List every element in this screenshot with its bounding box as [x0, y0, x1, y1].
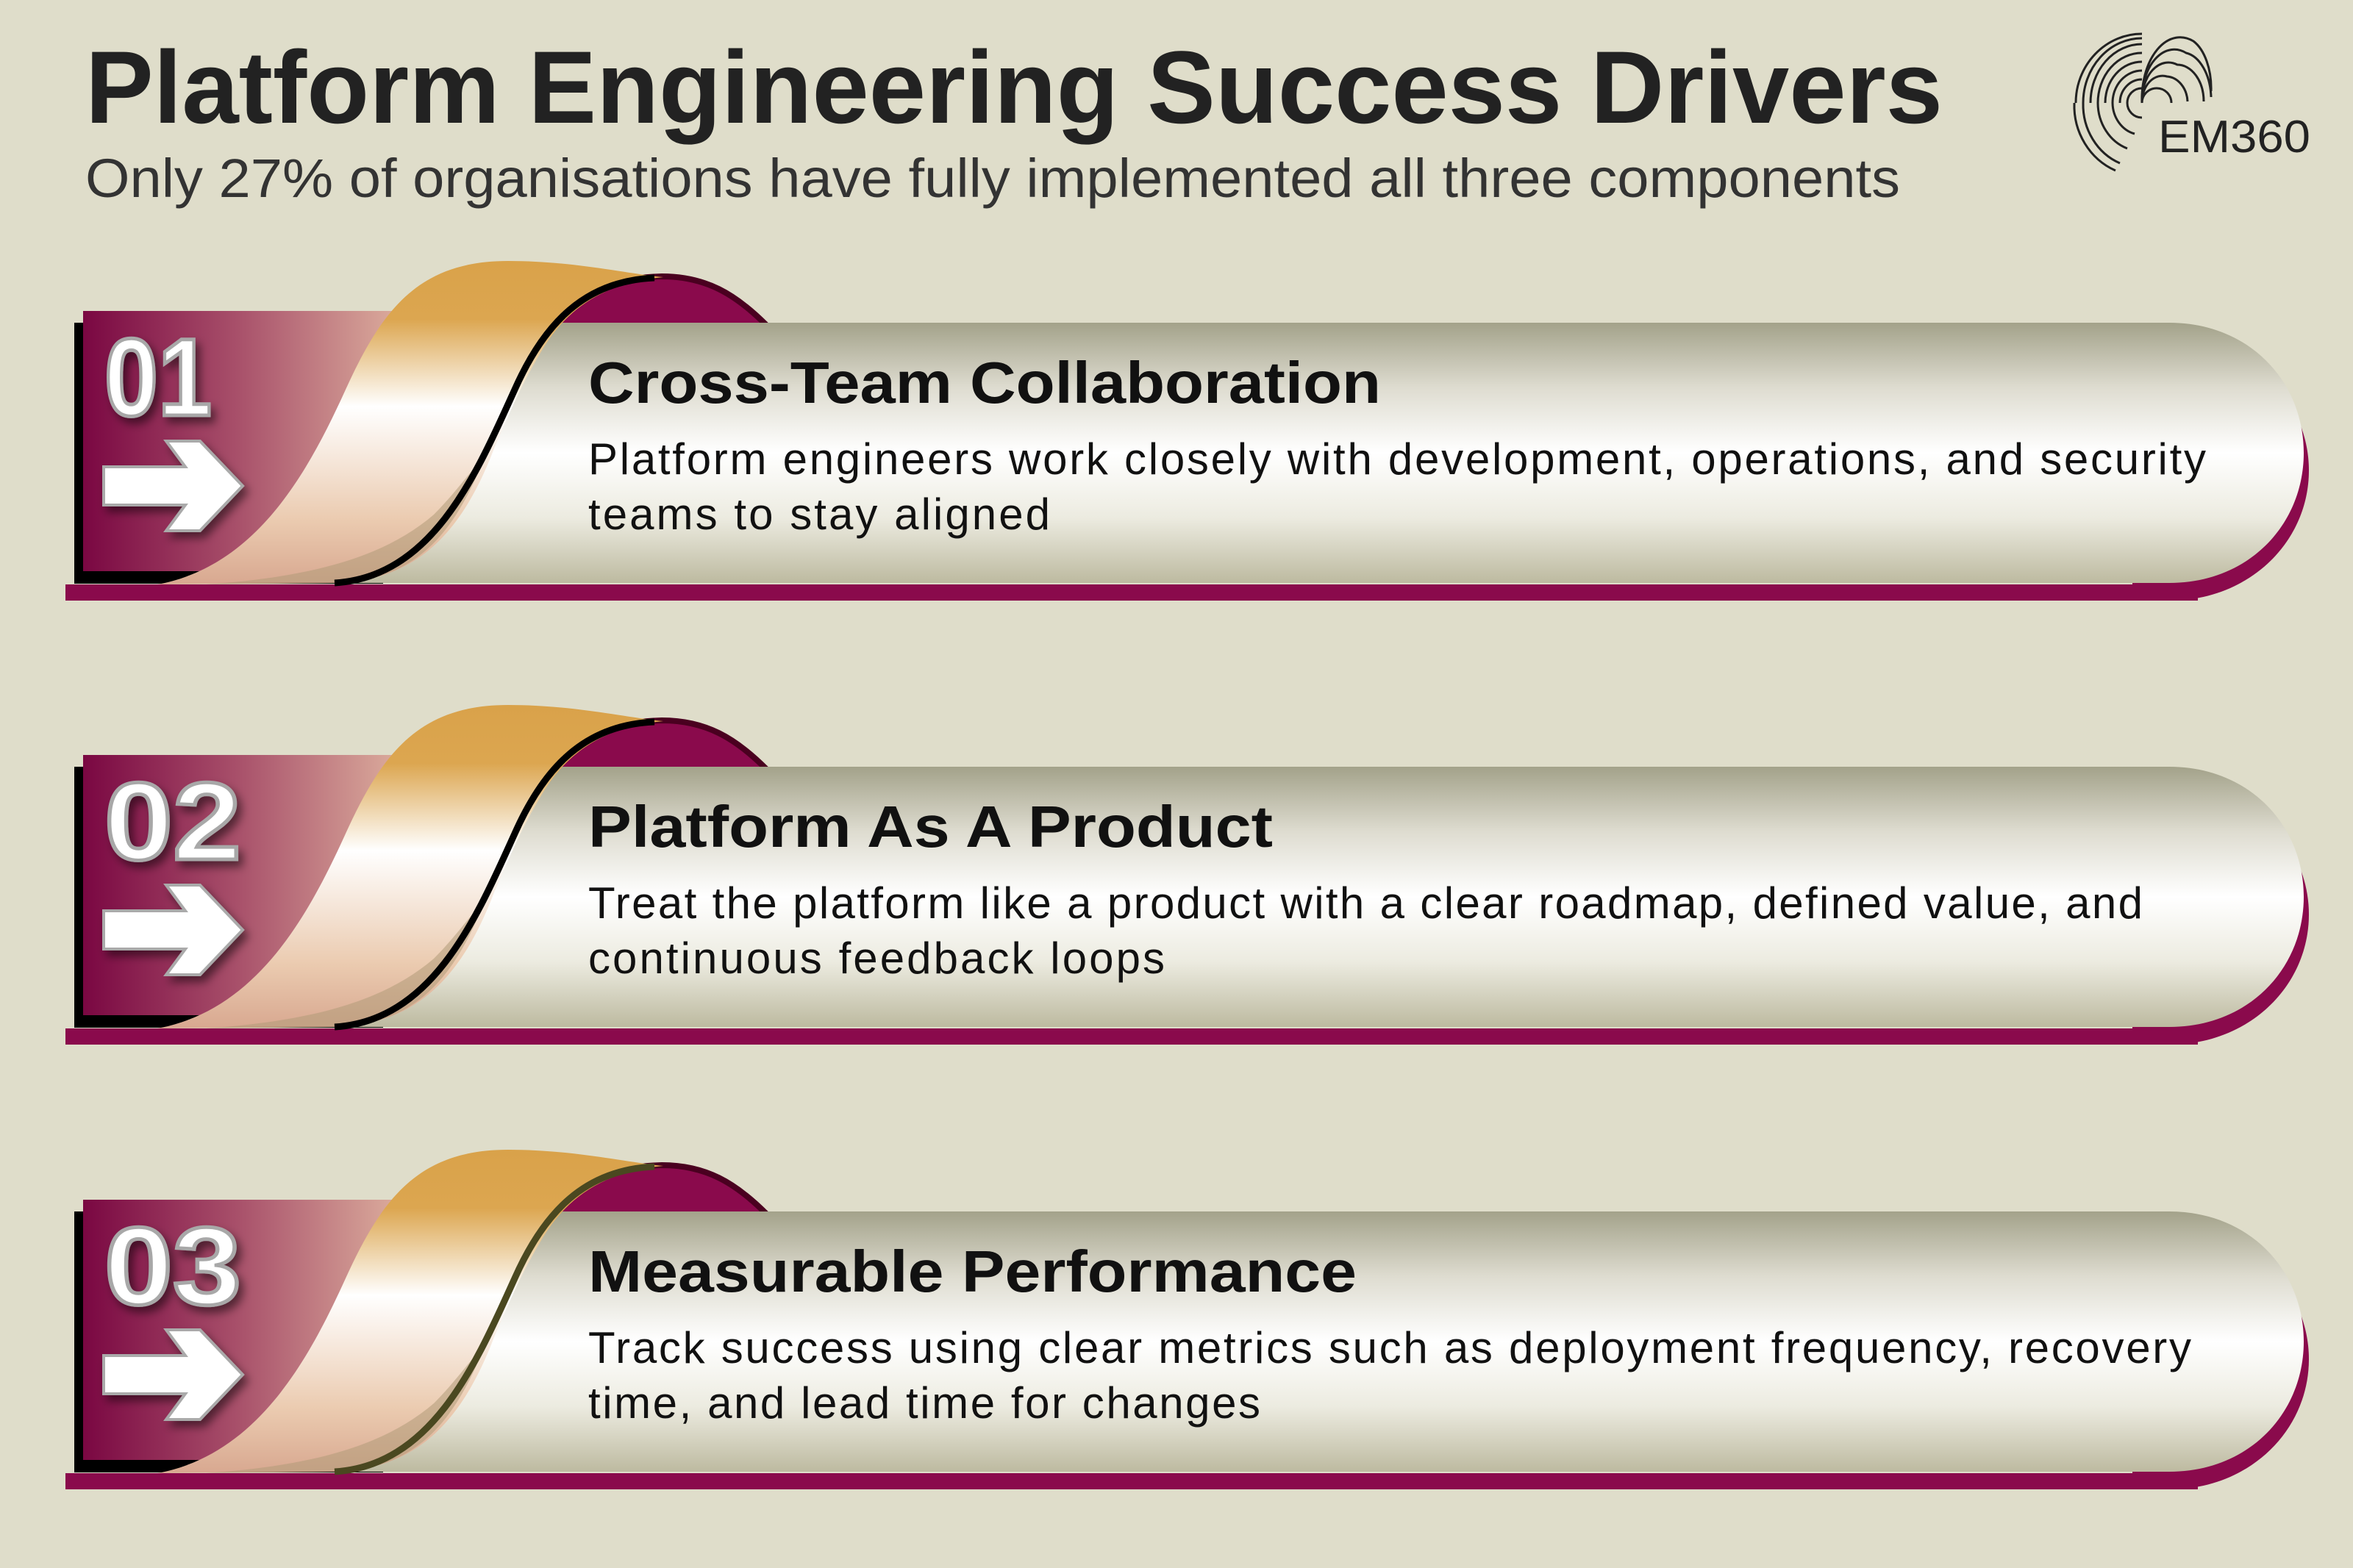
- number 03: 03: [104, 1204, 241, 1328]
- number 02: 02: [104, 759, 241, 883]
- body text: Platform engineers work closely with development, operations, and security: [588, 434, 2206, 484]
- panel: 03 Measurable Performance: [65, 1150, 2309, 1489]
- logo: EM360: [2074, 34, 2310, 171]
- logo: EM360: EM360: [2158, 112, 2310, 162]
- panel: 01 Cross-Team Collaboration: [65, 261, 2309, 601]
- icon: arrow: [104, 1330, 243, 1420]
- body text: continuous feedback loops: [588, 934, 1165, 983]
- heading: Measurable Performance: [588, 1239, 1357, 1304]
- body text: teams to stay aligned: [588, 490, 1050, 539]
- body text: time, and lead time for changes: [588, 1378, 1260, 1428]
- heading: Cross-Team Collaboration: [588, 350, 1381, 415]
- panel: 02 Platform As A Product: [65, 705, 2309, 1045]
- number 01: 01: [104, 315, 212, 439]
- icon: arrow: [104, 441, 243, 531]
- heading: Platform As A Product: [588, 794, 1273, 859]
- icon: arrow: [104, 885, 243, 975]
- body text: Track success using clear metrics such as deployment frequency, recovery: [588, 1323, 2191, 1372]
- title: Platform Engineering Success Drivers: [85, 29, 1943, 145]
- body text: Treat the platform like a product with a clear roadmap, defined value, and: [588, 878, 2143, 928]
- subtitle: Only 27% of organisations have fully implemented all three components: [85, 148, 1900, 209]
